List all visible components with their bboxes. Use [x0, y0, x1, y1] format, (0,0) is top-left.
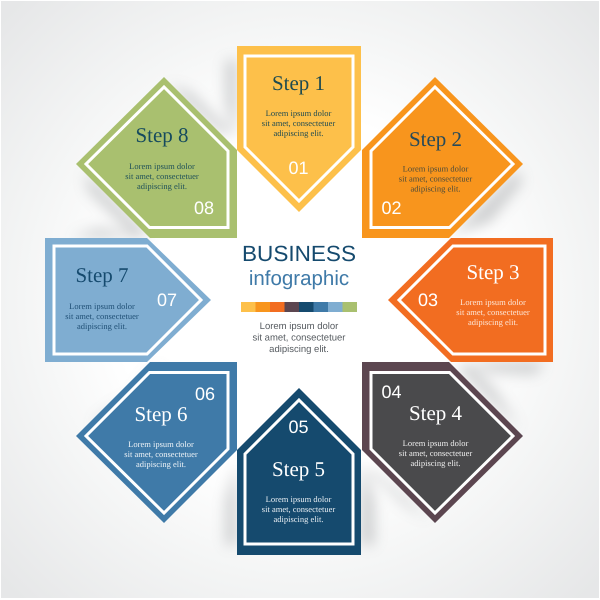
step 5: adipiscing elit.	[273, 514, 324, 524]
step 1: 01	[288, 158, 309, 178]
step 6: Step 6	[134, 402, 188, 426]
step 2: Lorem ipsum dolor	[403, 164, 468, 174]
step 4	[362, 362, 523, 523]
step 3: Step 3	[466, 260, 520, 284]
step 4: adipiscing elit.	[410, 458, 461, 468]
step 8	[76, 77, 237, 238]
step 1	[237, 46, 361, 212]
step 7	[45, 238, 211, 362]
step 1: sit amet, consectetuer	[262, 118, 335, 128]
step 5: Lorem ipsum dolor	[266, 494, 331, 504]
center heading: BUSINESS	[242, 241, 356, 266]
step 6: Lorem ipsum dolor	[128, 439, 194, 449]
center text block: adipiscing elit.	[269, 344, 329, 355]
step 3	[388, 238, 553, 362]
shape shadows	[70, 60, 545, 545]
step 6: sit amet, consectetuer	[124, 449, 198, 459]
step 3: Lorem ipsum dolor	[460, 297, 526, 307]
step 2: adipiscing elit.	[410, 184, 461, 194]
step 7: adipiscing elit.	[77, 321, 127, 331]
step 2: sit amet, consectetuer	[399, 174, 472, 184]
step 8: Lorem ipsum dolor	[129, 161, 195, 171]
color bar	[241, 302, 357, 312]
step 5	[237, 388, 361, 555]
step 6: 06	[195, 384, 215, 404]
step 2	[362, 77, 523, 238]
step 2: Step 2	[409, 127, 462, 151]
step 4: 04	[381, 382, 402, 402]
step 3: adipiscing elit.	[468, 317, 518, 327]
step 1: Lorem ipsum dolor	[266, 108, 331, 118]
step 8: sit amet, consectetuer	[125, 171, 199, 181]
step 5: sit amet, consectetuer	[262, 504, 335, 514]
center text block	[253, 321, 345, 355]
center heading	[242, 241, 356, 290]
step 4: Lorem ipsum dolor	[403, 438, 468, 448]
step 4: Step 4	[409, 401, 463, 425]
step 8: 08	[194, 198, 214, 218]
step 7: 07	[157, 290, 177, 310]
step 1: adipiscing elit.	[273, 128, 324, 138]
step 5: Step 5	[272, 457, 325, 481]
step 1: Step 1	[272, 71, 325, 95]
step 6: adipiscing elit.	[136, 459, 186, 469]
step 3: sit amet, consectetuer	[456, 307, 530, 317]
center text block: Lorem ipsum dolor	[260, 321, 338, 332]
step 8: Step 8	[135, 123, 189, 147]
step 5: 05	[288, 417, 309, 437]
step 7: Lorem ipsum dolor	[69, 301, 135, 311]
step 4: sit amet, consectetuer	[399, 448, 472, 458]
center text block: sit amet, consectetuer	[253, 332, 345, 344]
step 7: Step 7	[75, 263, 129, 287]
step 6	[76, 362, 237, 523]
step 2: 02	[381, 198, 402, 218]
step 7: sit amet, consectetuer	[65, 311, 139, 321]
step 8: adipiscing elit.	[137, 181, 187, 191]
step 3: 03	[418, 290, 438, 310]
center heading: infographic	[249, 267, 349, 290]
